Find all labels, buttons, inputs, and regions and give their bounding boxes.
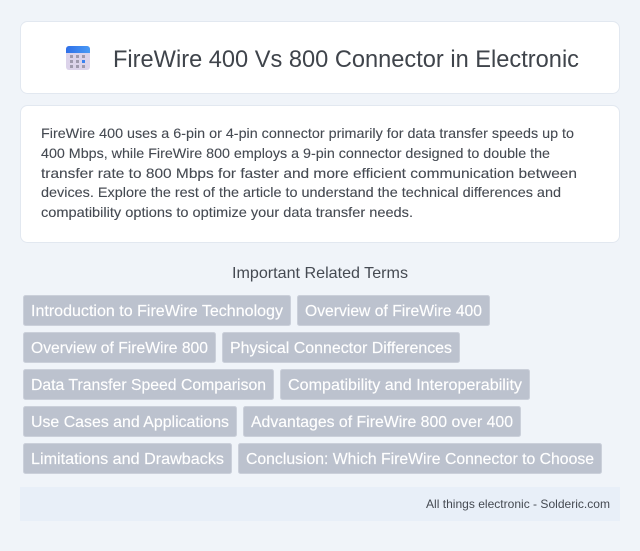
title: FireWire 400 Vs 800 Connector in Electronic [113, 46, 579, 73]
tag: overview 800 [24, 332, 216, 362]
tags: related terms [24, 296, 602, 474]
text block: description paragraph: FireWire 400 uses a 6-pin or 4-pin connector primarily for data transfer speeds up to [41, 125, 574, 141]
tag: speed comparison [24, 370, 274, 400]
tag: overview 400 [298, 296, 490, 326]
tag: advantages [244, 406, 520, 436]
text block: description paragraph: transfer rate to 800 Mbps for faster and more efficient communication between [41, 165, 577, 181]
tag: use cases: Use Cases and Applications [31, 414, 229, 431]
tag: speed comparison: Data Transfer Speed Comparison [31, 377, 266, 394]
tag: physical connector [222, 332, 460, 362]
tag: limitations [24, 444, 232, 474]
text block: description paragraph: 400 Mbps, while FireWire 800 employs a 9-pin connector designed to double the [41, 145, 550, 161]
tag: introduction [24, 296, 290, 326]
footer: All things electronic - Solderic.com [426, 497, 610, 511]
tag: use cases [24, 406, 236, 436]
text block: description paragraph [41, 125, 577, 220]
text block: description paragraph: compatibility options to optimize your data transfer needs. [41, 204, 413, 220]
panel: title header [20, 22, 620, 94]
footer [20, 487, 620, 521]
tag: advantages: Advantages of FireWire 800 over 400 [251, 414, 513, 431]
tag: limitations: Limitations and Drawbacks [31, 451, 224, 468]
panel: description [20, 106, 620, 242]
tag: physical connector: Physical Connector Differences [230, 340, 452, 357]
tag: introduction: Introduction to FireWire Technology [31, 303, 283, 320]
tag: compatibility: Compatibility and Interoperability [288, 377, 522, 394]
text block: description paragraph: devices. Explore the rest of the article to understand the technical differences and [41, 184, 561, 200]
tag: compatibility [280, 370, 530, 400]
tag: overview 800: Overview of FireWire 800 [31, 340, 208, 357]
tag: conclusion [238, 444, 602, 474]
tag: conclusion: Conclusion: Which FireWire Connector to Choose [246, 451, 594, 468]
tag: overview 400: Overview of FireWire 400 [305, 303, 482, 320]
icon: calendar grid [66, 46, 90, 70]
heading: important related terms: Important Related Terms [232, 265, 408, 282]
